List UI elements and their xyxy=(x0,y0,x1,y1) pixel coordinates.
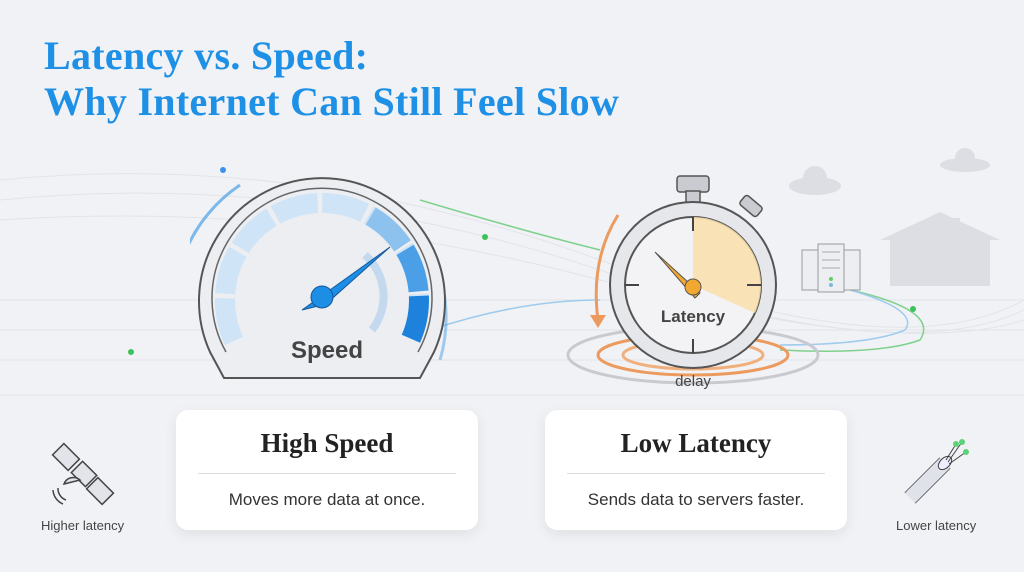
card: low latency: Sends data to servers faster. xyxy=(588,490,804,509)
card: low latency: Low Latency xyxy=(621,428,771,458)
title: Why Internet Can Still Feel Slow xyxy=(44,79,619,124)
label: higher latency: Higher latency xyxy=(41,518,124,533)
icon: servers xyxy=(802,244,860,292)
icon: stopwatch: Latency xyxy=(661,307,726,326)
icon: fiber cable xyxy=(904,439,969,504)
icon: satellite xyxy=(52,442,114,506)
card: low latency xyxy=(545,410,847,530)
icon: stopwatch: delay xyxy=(675,373,711,390)
icon: speedometer: Speed xyxy=(291,337,363,364)
icon: speedometer xyxy=(190,177,448,379)
title xyxy=(44,33,619,124)
card: high speed: Moves more data at once. xyxy=(229,490,425,509)
icon: stopwatch xyxy=(566,175,820,390)
title: Latency vs. Speed: xyxy=(44,33,368,78)
card: high speed xyxy=(176,410,478,530)
label: lower latency: Lower latency xyxy=(896,518,976,533)
card: high speed: High Speed xyxy=(261,428,393,458)
